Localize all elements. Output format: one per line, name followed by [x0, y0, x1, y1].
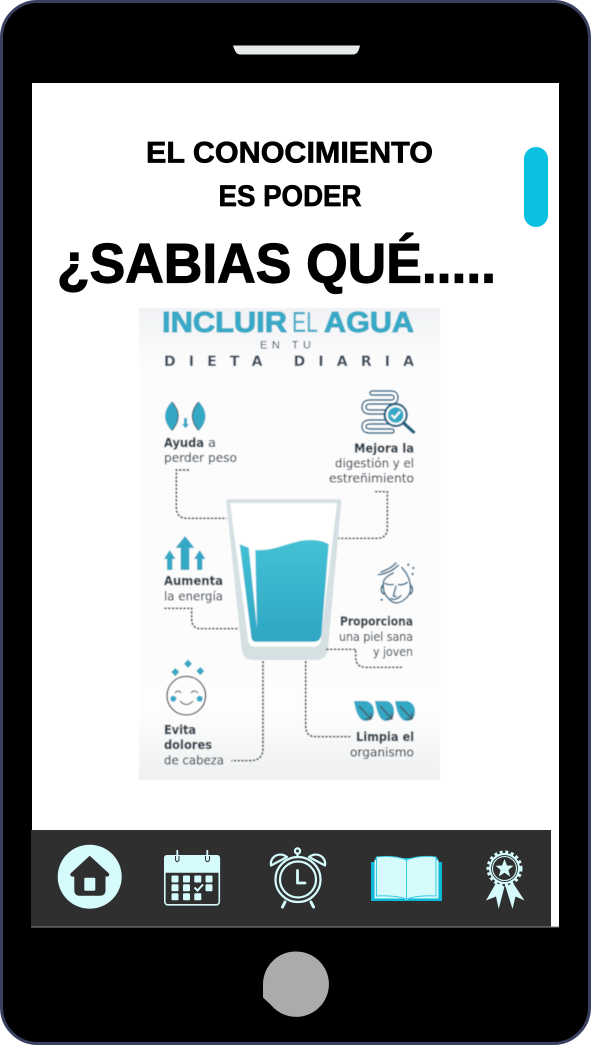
- icon: intestine and magnifier: [364, 393, 414, 432]
- benefit: evita dolores de cabeza: Evita: [164, 722, 196, 737]
- benefit: limpia el organismo: [350, 701, 415, 760]
- glass of water: [226, 499, 341, 660]
- benefit: aumenta la energia: Aumenta: [164, 573, 223, 588]
- home button: [263, 951, 329, 1017]
- panel background: [139, 308, 440, 780]
- benefit: ayuda a perder peso: Ayuda: [164, 435, 204, 450]
- benefit: piel sana: y joven: [373, 644, 413, 659]
- infographic title: EN TU: [260, 340, 311, 352]
- infographic title: EL: [292, 307, 318, 339]
- benefit: limpia el organismo: Limpia el: [356, 729, 414, 744]
- icon: leaves: [354, 701, 415, 721]
- benefit: piel sana: [339, 563, 415, 659]
- icon: open book: [371, 856, 442, 901]
- benefit: aumenta la energia: [164, 536, 223, 604]
- infographic title: DIETA DIARIA: [164, 354, 414, 370]
- screen: [32, 83, 559, 927]
- benefit: mejora la digestion: Mejora la: [354, 441, 414, 456]
- heading: el conocimiento es poder: ES PODER: [218, 180, 362, 213]
- benefit: mejora la digestion: [329, 393, 414, 486]
- benefit: piel sana: una piel sana: [339, 629, 413, 644]
- heading: sabias que: ¿SABIAS QUÉ.....: [57, 232, 496, 295]
- icon: up arrows: [164, 536, 206, 570]
- icon: smiling face with sparkles: [167, 660, 206, 715]
- benefit: mejora la digestion: digestión y el: [335, 456, 414, 471]
- benefit: ayuda a perder peso: [164, 402, 237, 465]
- benefit: evita dolores de cabeza: dolores: [164, 737, 212, 752]
- icon: face: [378, 563, 415, 603]
- infographic title: INCLUIR: [162, 307, 287, 339]
- icon: award ribbon: [486, 852, 524, 909]
- benefit: mejora la digestion: estreñimiento: [329, 471, 414, 486]
- benefit: evita dolores de cabeza: de cabeza: [164, 753, 224, 768]
- benefit: limpia el organismo: organismo: [350, 745, 414, 760]
- benefit: ayuda a perder peso: a: [208, 435, 216, 450]
- infographic panel: incluir el agua: [139, 307, 440, 780]
- heading: el conocimiento es poder: EL CONOCIMIENTO: [146, 137, 433, 170]
- icon: home: [58, 845, 122, 909]
- icon: calendar: [164, 850, 220, 905]
- scroll indicator: [524, 147, 548, 227]
- infographic title: AGUA: [324, 307, 414, 339]
- benefit: ayuda a perder peso: perder peso: [164, 450, 237, 465]
- benefit: evita dolores de cabeza: [164, 660, 224, 768]
- bottom navigation bar: [31, 830, 559, 928]
- benefit: piel sana: Proporciona: [340, 614, 413, 629]
- speaker notch: [233, 46, 360, 54]
- icon: alarm clock: [271, 848, 325, 907]
- infographic title: [162, 307, 414, 370]
- connector lines: [164, 470, 403, 761]
- benefit: aumenta la energia: la energía: [164, 589, 223, 604]
- icon: lenses: [165, 402, 206, 431]
- heading: el conocimiento es poder: [146, 137, 433, 213]
